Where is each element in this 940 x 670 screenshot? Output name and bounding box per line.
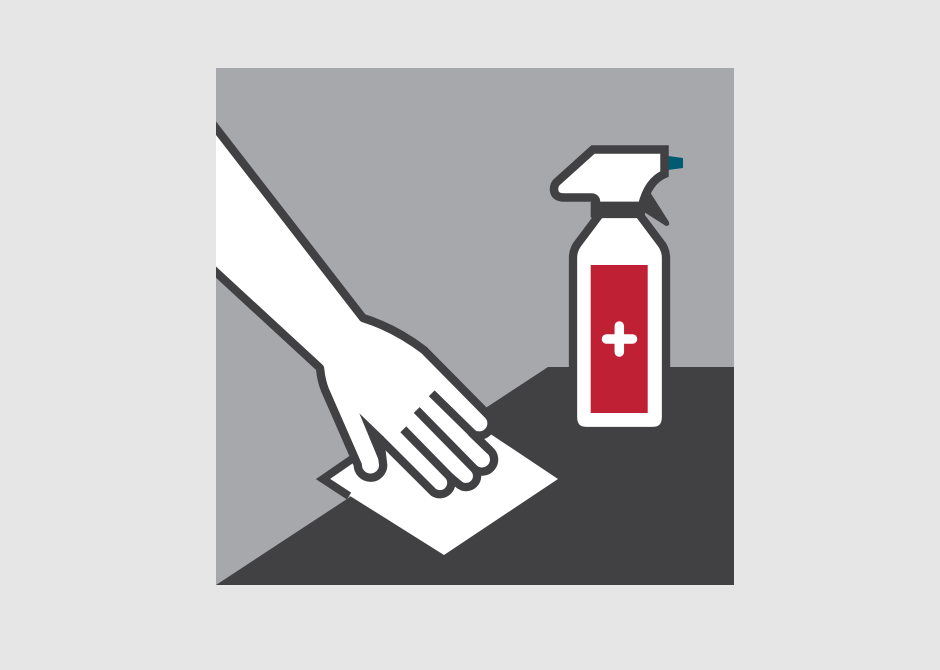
infographic: hand wiping table beside disinfectant spray bottle: [216, 68, 734, 585]
icon: hand and arm: [205, 114, 494, 494]
bottle collar: [591, 202, 645, 218]
bottle trigger: [644, 190, 669, 226]
bottle nozzle: [668, 156, 683, 170]
panel: grey wall square: [216, 68, 734, 585]
wipe cloth: [323, 403, 558, 555]
red label: [591, 265, 648, 413]
finger separators: [403, 393, 490, 478]
wipe cloth outline: [323, 459, 352, 496]
thumb notch: [359, 413, 384, 460]
bottle body: [573, 214, 666, 431]
white cross symbol: [606, 326, 632, 352]
table surface: [216, 367, 734, 585]
icon: spray bottle: [554, 150, 683, 431]
bottle spray head: [554, 150, 664, 206]
